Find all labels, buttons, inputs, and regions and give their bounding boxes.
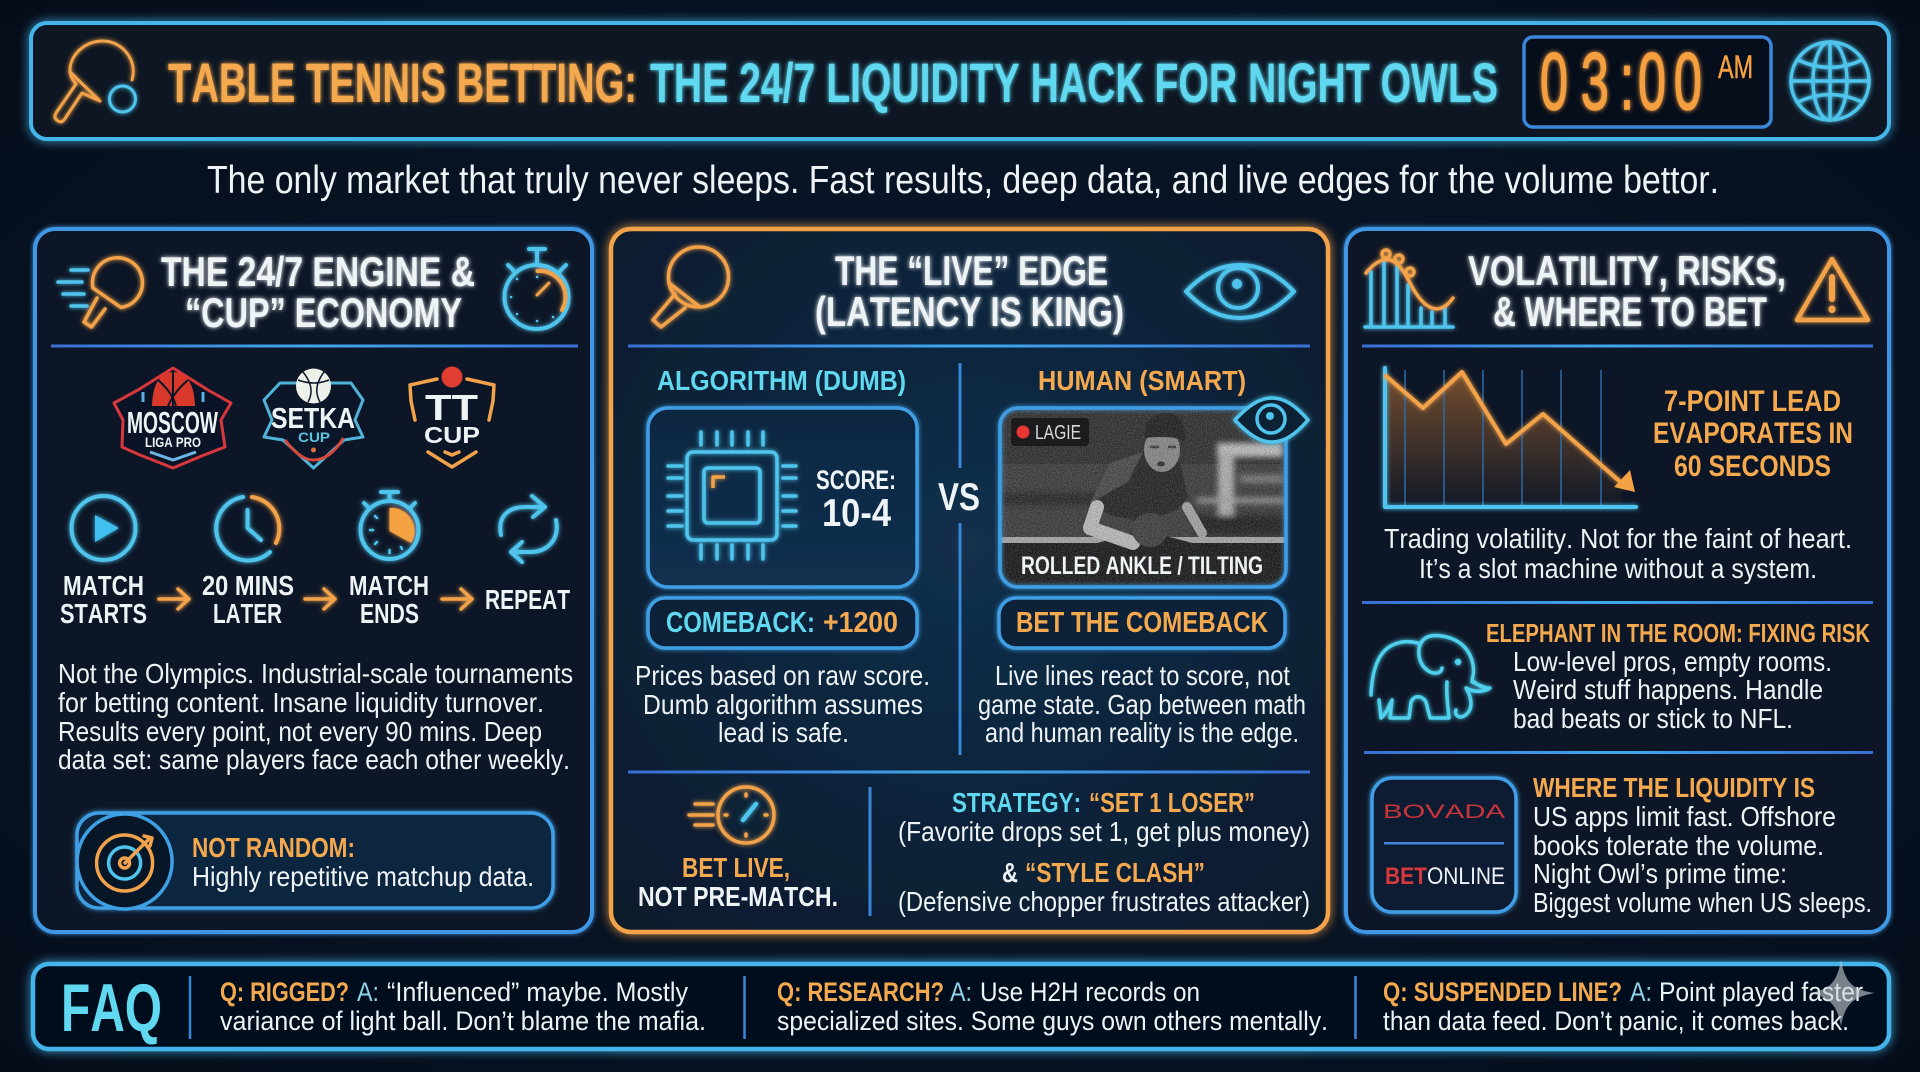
bet live callout (638, 852, 838, 912)
chart: falling line (1385, 368, 1636, 507)
logo: Moscow Liga Pro: LIGA PRO (145, 434, 201, 450)
FAQ item: research: Q: RESEARCH? (777, 977, 944, 1007)
algorithm description: Prices based on raw score. (635, 660, 930, 691)
icon: elephant (1371, 636, 1490, 718)
panel: the live edge (611, 229, 1328, 932)
icon: target (97, 835, 153, 891)
sportsbook logos box: BOVADA (1383, 802, 1505, 823)
heading: VOLATILITY, RISKS, (1468, 247, 1786, 294)
heading (1468, 247, 1786, 335)
icon: eye (1186, 265, 1294, 318)
icon: match ends stopwatch (360, 492, 418, 559)
live badge (1011, 418, 1089, 446)
icon: speeding paddle (58, 258, 142, 327)
flow step labels: STARTS (60, 598, 147, 629)
flow step labels: ENDS (360, 598, 419, 629)
heading (815, 247, 1124, 335)
FAQ item: rigged (220, 977, 706, 1036)
icon: match starts play button (72, 496, 136, 560)
FAQ item: suspended line: Point played faster (1659, 977, 1863, 1007)
flow step labels: 20 MINS (202, 570, 294, 601)
liquidity text: Night Owl’s prime time: (1533, 858, 1787, 889)
FAQ label: FAQ (61, 970, 162, 1046)
icon: stopwatch (504, 249, 568, 329)
FAQ item: rigged: “Influenced” maybe. Mostly (387, 977, 688, 1007)
title: TABLE TENNIS BETTING: (168, 51, 637, 114)
strategy text: “STYLE CLASH” (1025, 857, 1205, 888)
icon: warning triangle (1797, 259, 1868, 320)
panel: volatility, risks and where to bet (1346, 229, 1889, 932)
heading: “CUP” ECONOMY (185, 289, 462, 336)
FAQ item: rigged: variance of light ball. Don’t blame the mafia. (220, 1006, 706, 1036)
FAQ item: suspended line: Q: SUSPENDED LINE? (1383, 977, 1622, 1007)
title: THE 24/7 LIQUIDITY HACK FOR NIGHT OWLS (650, 51, 1498, 114)
human description (978, 660, 1306, 748)
callout: not random: Highly repetitive matchup data. (192, 861, 534, 892)
bet live callout: BET LIVE, (682, 852, 790, 883)
FAQ item: research: specialized sites. Some guys own others mentally. (777, 1006, 1328, 1036)
VS divider: VS (938, 476, 980, 519)
panel: FAQ (33, 960, 1889, 1049)
liquidity text: US apps limit fast. Offshore (1533, 801, 1836, 832)
strategy text (898, 787, 1310, 917)
flow step labels: REPEAT (485, 584, 570, 615)
FAQ item: research: A: (950, 977, 972, 1007)
column heading: human: HUMAN (SMART) (1038, 365, 1246, 396)
heading: (LATENCY IS KING) (815, 288, 1124, 335)
flow arrows (159, 589, 472, 609)
callout: 7-point lead (1653, 385, 1853, 483)
FAQ item: rigged: Q: RIGGED? (220, 977, 349, 1007)
strategy text: “SET 1 LOSER” (1089, 787, 1255, 818)
FAQ item: suspended line (1383, 977, 1863, 1036)
flow step labels: LATER (213, 598, 282, 629)
callout: 7-point lead: 60 SECONDS (1674, 450, 1831, 483)
body text: Not the Olympics. Industrial-scale tournaments (58, 658, 573, 689)
sportsbook logos box (1372, 778, 1516, 912)
live badge: LAGIE (1035, 422, 1081, 444)
volatility text: Trading volatility. Not for the faint of heart. (1384, 523, 1852, 554)
logo: TT Cup (410, 366, 494, 467)
FAQ item: rigged: A: (357, 977, 379, 1007)
title (168, 51, 1498, 114)
callout: 7-point lead: EVAPORATES IN (1653, 417, 1853, 450)
fixing risk text: Weird stuff happens. Handle (1513, 674, 1823, 705)
FAQ item: suspended line: than data feed. Don’t panic, it comes back. (1383, 1006, 1849, 1036)
body text: for betting content. Insane liquidity turnover. (58, 687, 544, 718)
fixing risk text: bad beats or stick to NFL. (1513, 703, 1793, 734)
heading: THE 24/7 ENGINE & (161, 248, 475, 295)
bet live callout: NOT PRE-MATCH. (638, 881, 838, 912)
body text: data set: same players face each other weekly. (58, 744, 570, 775)
logo: TT Cup: TT (425, 387, 478, 428)
icon: roller coaster (1365, 250, 1453, 327)
icon: paddle (653, 247, 728, 327)
human description: and human reality is the edge. (985, 717, 1299, 748)
flow step labels (60, 570, 570, 629)
icon: globe (1791, 42, 1869, 120)
logo: Setka Cup: CUP (298, 429, 330, 445)
icon: table tennis paddle and ball (55, 41, 136, 122)
comeback odds pill: COMEBACK: (666, 607, 815, 639)
flow step labels: MATCH (63, 570, 144, 601)
strategy text: STRATEGY: (952, 787, 1081, 818)
heading: THE “LIVE” EDGE (835, 247, 1108, 294)
FAQ item: suspended line: A: (1630, 977, 1652, 1007)
subtitle: The only market that truly never sleeps. Fast results, deep data, and live edges for the volume bettor. (207, 159, 1719, 202)
fixing risk text (1486, 618, 1870, 734)
column heading: algorithm: ALGORITHM (DUMB) (657, 365, 906, 396)
fixing risk text: Low-level pros, empty rooms. (1513, 646, 1832, 677)
bet the comeback pill (999, 598, 1285, 648)
volatility text: It’s a slot machine without a system. (1419, 553, 1817, 584)
liquidity text (1533, 772, 1872, 918)
heading: & WHERE TO BET (1493, 288, 1767, 335)
algorithm description: Dumb algorithm assumes (643, 689, 923, 720)
digital clock (1524, 37, 1771, 127)
icon: small eye (1235, 398, 1308, 442)
logo: TT Cup: CUP (424, 422, 480, 448)
heading (161, 248, 475, 336)
strategy text: (Favorite drops set 1, get plus money) (898, 816, 1310, 847)
header banner (31, 23, 1889, 139)
body text: Results every point, not every 90 mins. Deep (58, 716, 542, 747)
flow step labels: MATCH (349, 570, 429, 601)
player photo: ROLLED ANKLE / TILTING (1021, 552, 1263, 580)
comeback odds pill (648, 598, 917, 648)
human description: game state. Gap between math (978, 689, 1306, 720)
algorithm score box (648, 408, 917, 587)
liquidity text: books tolerate the volume. (1533, 830, 1824, 861)
panel: 24/7 engine and cup economy (35, 229, 592, 932)
icon: repeat arrows (500, 496, 557, 562)
logo: Setka Cup (264, 368, 363, 468)
liquidity text: WHERE THE LIQUIDITY IS (1533, 772, 1815, 803)
callout: not random (77, 813, 553, 909)
digital clock: 03:00 (1540, 37, 1702, 127)
sportsbook logos box: BET (1385, 863, 1427, 890)
icon: sparkle watermark (1809, 960, 1875, 1026)
bet the comeback pill: BET THE COMEBACK (1016, 607, 1268, 639)
callout: 7-point lead: 7-POINT LEAD (1664, 385, 1841, 418)
strategy text: (Defensive chopper frustrates attacker) (898, 886, 1310, 917)
icon: chip (668, 432, 796, 559)
logo: Moscow Liga Pro (114, 368, 231, 468)
volatility text (1384, 523, 1852, 584)
algorithm description: lead is safe. (718, 717, 849, 748)
algorithm description (635, 660, 930, 748)
icon: 20 mins clock (216, 497, 279, 561)
icon: speed clock (689, 787, 774, 843)
logo: Moscow Liga Pro: MOSCOW (127, 405, 218, 440)
algorithm score box: SCORE: (816, 465, 896, 495)
FAQ item: research (777, 977, 1328, 1036)
digital clock: AM (1718, 49, 1753, 85)
player photo (1000, 398, 1308, 587)
logo: Setka Cup: SETKA (271, 403, 355, 435)
body text (58, 658, 573, 775)
algorithm score box: 10-4 (822, 492, 891, 535)
callout: not random: NOT RANDOM: (192, 832, 355, 863)
strategy text: & (1002, 857, 1018, 888)
comeback odds pill: +1200 (823, 607, 898, 639)
human description: Live lines react to score, not (995, 660, 1290, 691)
sportsbook logos box: ONLINE (1427, 863, 1505, 890)
FAQ item: research: Use H2H records on (980, 977, 1200, 1007)
